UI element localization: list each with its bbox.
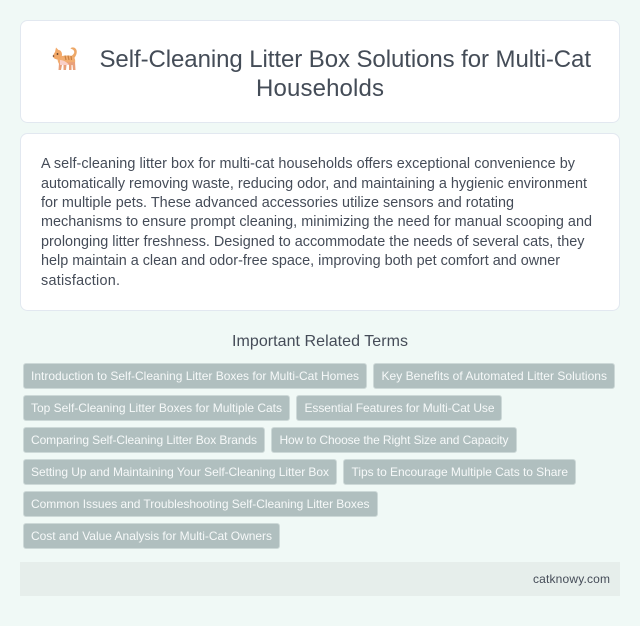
tag: Introduction to Self-Cleaning Litter Boxes for Multi-Cat Homes [31,369,359,383]
tag [296,396,502,420]
tag: How to Choose the Right Size and Capacity [280,433,508,447]
description text: mechanisms to ensure prompt cleaning, minimizing the need for manual scooping and [41,214,592,230]
tag: Essential Features for Multi-Cat Use [304,401,495,415]
description text: A self-cleaning litter box for multi-cat households offers exceptional convenience by [41,156,576,172]
tag: Common Issues and Troubleshooting Self-Cleaning Litter Boxes [31,497,370,511]
header panel [20,20,620,122]
tag [344,460,576,484]
tag [24,428,264,452]
panel: description [20,134,620,310]
description text [41,156,592,289]
description text: automatically removing waste, reducing odor, and maintaining a hygienic environment [41,176,587,192]
title: Households [256,75,384,102]
description text: help maintain a clean and odor-free space, improving both pet comfort and owner [41,253,560,269]
description text: for multiple pets. These advanced accessories utilize sensors and rotating [41,195,514,211]
tag: Cost and Value Analysis for Multi-Cat Owners [31,529,272,543]
tag [24,396,290,420]
footer [20,562,620,596]
tag [24,524,280,548]
tag list [24,364,614,548]
tag [272,428,516,452]
tag: Tips to Encourage Multiple Cats to Share [352,465,568,479]
tag: Setting Up and Maintaining Your Self-Cleaning Litter Box [31,465,329,479]
tag [24,492,378,516]
tag [24,364,366,388]
tag [374,364,614,388]
tag [24,460,336,484]
description text: satisfaction. [41,273,120,289]
heading: important related terms: Important Related Terms [232,333,408,350]
description text: prolonging litter freshness. Designed to accommodate the needs of several cats, they [41,234,585,250]
tag: Top Self-Cleaning Litter Boxes for Multiple Cats [31,401,282,415]
title [100,46,591,102]
title: Self-Cleaning Litter Box Solutions for Multi-Cat [100,46,591,73]
tag: Comparing Self-Cleaning Litter Box Brands [31,433,257,447]
tag: Key Benefits of Automated Litter Solutions [382,369,607,383]
icon: cat [53,47,77,70]
footer source text: catknowy.com [533,572,610,586]
